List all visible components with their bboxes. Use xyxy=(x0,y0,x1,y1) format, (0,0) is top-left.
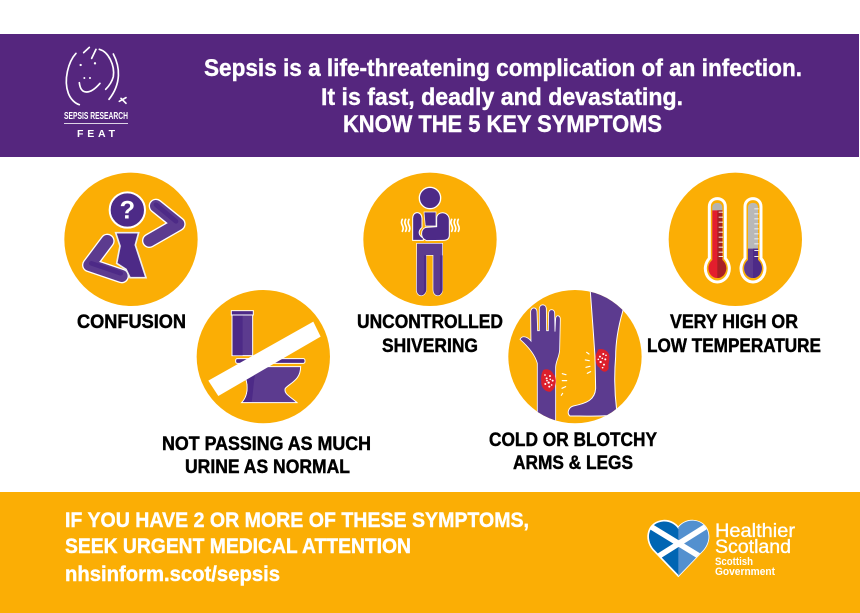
label: cold or blotchy xyxy=(489,430,657,474)
text: call to action: IF YOU HAVE 2 OR MORE OF THESE SYMPTOMS, xyxy=(65,509,529,532)
logo text: FEAT: FEAT xyxy=(77,128,116,140)
label: uncontrolled shivering xyxy=(357,312,503,357)
icon: blotch on leg xyxy=(595,349,609,372)
logo: Sepsis Research FEAT xyxy=(64,47,128,140)
icon: shiver lines xyxy=(401,219,459,231)
logo text: Healthier Scotland: Scotland xyxy=(715,537,791,558)
icon glyph: question mark: ? xyxy=(120,197,135,225)
label: very high or low temperature xyxy=(647,312,821,357)
text: call to action: nhsinform.scot/sepsis xyxy=(65,563,280,586)
panel: footer banner xyxy=(0,492,860,613)
panel: shivering symptom xyxy=(357,173,503,357)
label: very high or low temperature: VERY HIGH OR xyxy=(670,312,798,333)
icon: irritation marks xyxy=(561,352,591,395)
label: not passing urine: NOT PASSING AS MUCH xyxy=(162,434,371,455)
icon: crossed out toilet xyxy=(197,290,330,423)
logo: Healthier Scotland xyxy=(648,518,796,578)
icon: saltire heart xyxy=(648,518,715,578)
logo text: Sepsis Research: SEPSIS RESEARCH xyxy=(64,110,128,122)
panel: header banner xyxy=(0,34,859,157)
icon: arm and leg with blotches xyxy=(508,287,642,427)
label: not passing urine: URINE AS NORMAL xyxy=(185,457,350,478)
text: call to action xyxy=(65,509,529,586)
panel: blotchy arms and legs symptom xyxy=(489,287,657,474)
label: cold or blotchy: ARMS & LEGS xyxy=(513,453,633,474)
panel: not passing urine symptom xyxy=(162,290,371,478)
icon: hand-drawn face xyxy=(66,47,126,105)
logo text: Healthier Scotland xyxy=(715,521,796,578)
heading: header message xyxy=(204,55,802,138)
heading: header message: Sepsis is a life-threatening complication of an infection. xyxy=(204,55,802,82)
label: uncontrolled shivering: SHIVERING xyxy=(382,336,478,357)
icon: hot thermometer xyxy=(705,199,729,282)
icon: blotch on arm xyxy=(541,369,556,392)
logo text: Healthier Scotland: Healthier xyxy=(715,521,796,542)
heading: header message: It is fast, deadly and devastating. xyxy=(321,84,683,111)
panel: confusion symptom xyxy=(64,173,198,333)
icon: confused figure xyxy=(64,173,198,306)
logo text: Healthier Scotland: Government xyxy=(715,566,775,578)
icon: thermometers xyxy=(669,173,802,306)
logo text: Healthier Scotland: Scottish xyxy=(715,556,753,568)
icon: shivering figure xyxy=(363,173,497,306)
label: very high or low temperature: LOW TEMPERATURE xyxy=(647,336,821,357)
text: call to action: SEEK URGENT MEDICAL ATTENTION xyxy=(65,535,411,558)
icon: cold thermometer xyxy=(741,199,765,282)
label: confusion: CONFUSION xyxy=(77,312,186,333)
label: not passing urine xyxy=(162,434,371,478)
heading: header message: KNOW THE 5 KEY SYMPTOMS xyxy=(343,111,662,138)
label: uncontrolled shivering: UNCONTROLLED xyxy=(357,312,503,333)
panel: temperature symptom xyxy=(647,173,821,357)
label: cold or blotchy: COLD OR BLOTCHY xyxy=(489,430,657,451)
